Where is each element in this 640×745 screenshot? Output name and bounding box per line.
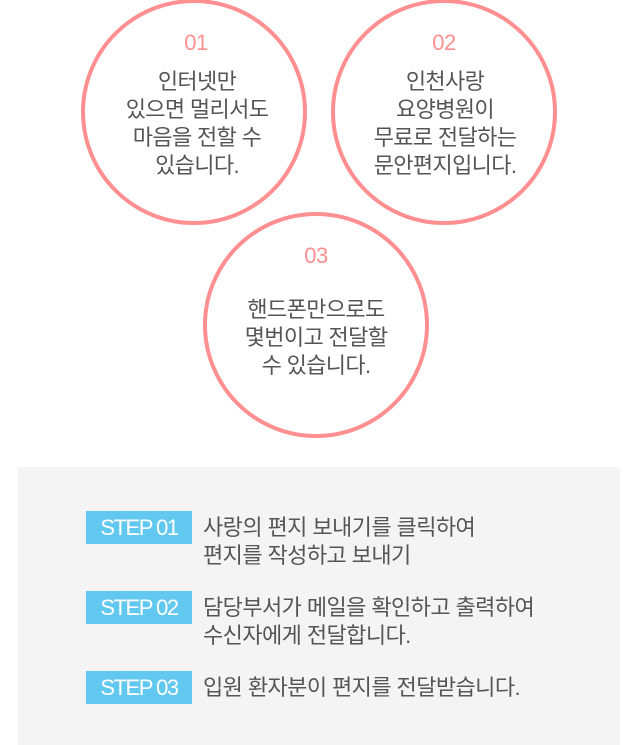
circle 3 text: 핸드폰만으로도 [247,297,385,322]
step 03 badge [86,671,192,704]
step 02 text: 담당부서가 메일을 확인하고 출력하여 [203,595,534,620]
circle 2 text [374,69,516,178]
circle 2 text: 요양병원이 [396,97,494,122]
circle 1 text: 인터넷만 [158,69,236,94]
number 01: 01 [184,30,208,55]
number 03: 03 [304,243,328,268]
circle 2 [331,0,557,225]
circle 3 text: 몇번이고 전달할 [245,325,387,350]
circle 1 text: 있습니다. [155,153,239,178]
circle 2 text: 인천사랑 [406,69,484,94]
circle 3 [203,212,429,438]
circle 1 text [126,69,268,178]
circle 1 text: 마음을 전할 수 [133,125,261,150]
step 02 badge [86,591,192,624]
number 02: 02 [432,30,456,55]
circle 3 text: 수 있습니다. [262,353,370,378]
step 01 text: 사랑의 편지 보내기를 클릭하여 [203,515,475,540]
step 03 badge: STEP 03 [100,675,178,700]
step 02 text: 수신자에게 전달합니다. [203,623,411,648]
step 02 badge: STEP 02 [100,595,178,620]
panel: steps [18,467,620,745]
circle 2 text: 무료로 전달하는 [374,125,516,150]
step 01 badge: STEP 01 [100,515,178,540]
circle 1 [81,0,307,225]
circle 3 text [245,297,388,378]
circle 1 text: 있으면 멀리서도 [126,97,268,122]
step 01 text: 편지를 작성하고 보내기 [203,543,411,568]
step 03 text: 입원 환자분이 편지를 전달받습니다. [203,675,520,700]
circle 2 text: 문안편지입니다. [374,153,516,178]
step 01 text [203,515,475,568]
step 01 badge [86,511,192,544]
step 02 text [203,595,534,648]
